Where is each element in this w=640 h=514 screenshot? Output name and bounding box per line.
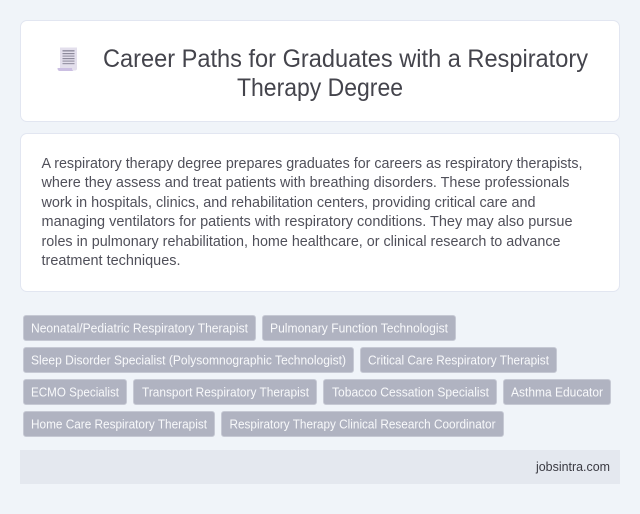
tag (24, 412, 214, 436)
text block: description: roles in pulmonary rehabilitation, home healthcare, or clinical research to advance (42, 233, 560, 250)
tag (222, 412, 504, 436)
footer: jobsintra.com (535, 460, 610, 474)
tag: Tobacco Cessation Specialist (332, 384, 489, 400)
tag (360, 348, 556, 372)
text block: description: where they assess and treat patients with breathing disorders. These professionals (41, 174, 570, 191)
tag: Pulmonary Function Technologist (270, 320, 448, 336)
tag: Asthma Educator (511, 384, 604, 400)
text block: description: work in hospitals, clinics, and rehabilitation centers, providing critical care and (41, 194, 535, 211)
panel: description card (20, 134, 620, 292)
title: Career Paths for Graduates with a Respiratory (103, 45, 588, 73)
panel: header card (20, 20, 620, 122)
tag (24, 348, 354, 372)
tag: Transport Respiratory Therapist (142, 384, 309, 400)
tag: Critical Care Respiratory Therapist (368, 352, 549, 368)
tag: ECMO Specialist (31, 384, 119, 400)
text block: description: A respiratory therapy degree prepares graduates for careers as respiratory therapists, (42, 155, 582, 172)
tag (262, 316, 456, 340)
title: Therapy Degree (237, 74, 403, 102)
text block: description (41, 155, 583, 269)
tag: Neonatal/Pediatric Respiratory Therapist (31, 320, 248, 336)
icon: scroll document (58, 48, 77, 71)
text block: description: managing ventilators for patients with respiratory conditions. They may also pursue (42, 213, 572, 230)
tag (504, 380, 610, 404)
tag (24, 380, 126, 404)
text block: description: treatment techniques. (42, 252, 180, 269)
title (103, 45, 588, 102)
tags: career paths (24, 316, 610, 436)
tag: Sleep Disorder Specialist (Polysomnographic Technologist) (31, 352, 346, 368)
tag (24, 316, 256, 340)
tag: Home Care Respiratory Therapist (31, 416, 207, 432)
tag (324, 380, 496, 404)
tag: Respiratory Therapy Clinical Research Coordinator (230, 416, 496, 432)
footer (20, 450, 620, 484)
tag (134, 380, 316, 404)
